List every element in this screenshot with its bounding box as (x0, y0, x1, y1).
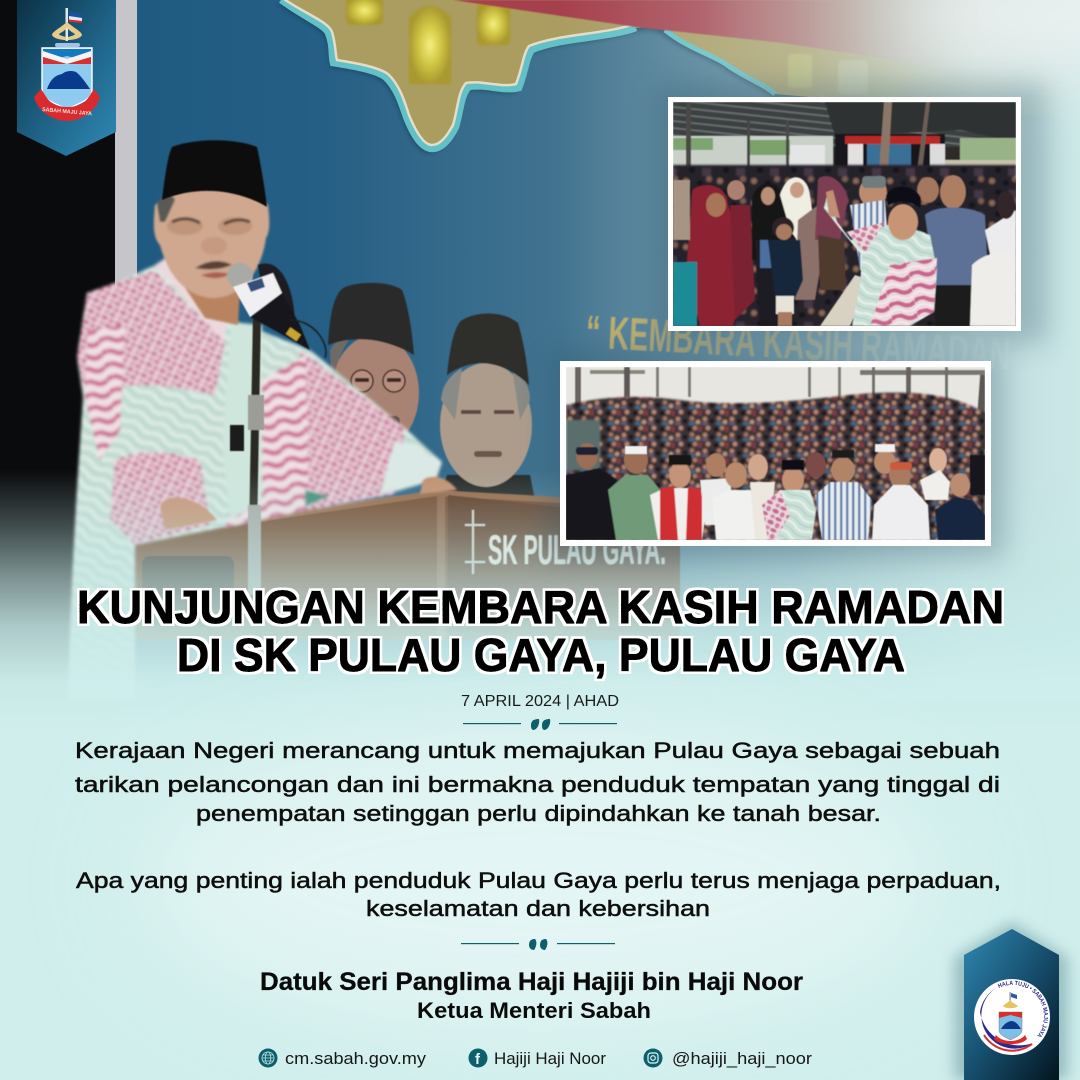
footer: facebook: f (475, 1051, 481, 1068)
statement paragraph one: tarikan pelancongan dan ini bermakna penduduk tempatan yang tinggal di (75, 772, 1000, 797)
gold arch ornament (278, 0, 1080, 153)
podium (133, 493, 680, 640)
date line: 7 APRIL 2024 | AHAD (461, 693, 619, 710)
icon: red ribbon with motto: SABAH MAJU JAYA (42, 107, 92, 117)
small crest (994, 992, 1027, 1044)
top-right corner haze (890, 0, 1080, 70)
panel: bottom-right slogan pennant (947, 918, 1075, 1080)
hands, neck and face (154, 186, 457, 530)
boy in navy (772, 217, 794, 239)
icon: red ribbon with motto (34, 89, 100, 121)
green shirt man (624, 446, 648, 474)
shirt (68, 255, 442, 700)
photo: visit crowd with chief minister (655, 84, 1047, 344)
logo disc (974, 979, 1050, 1055)
left dark wall (0, 0, 115, 780)
right pale fade (560, 0, 1080, 700)
blue and red crescents (980, 988, 1033, 1051)
woman behind (748, 454, 768, 480)
title (77, 581, 1004, 681)
banner portrait: man one (328, 283, 419, 451)
centre light glow (140, 730, 940, 1030)
floor (820, 275, 870, 326)
white blouse woman (929, 448, 947, 472)
back men (874, 450, 896, 474)
white shirt man behind (706, 453, 726, 477)
title: DI SK PULAU GAYA, PULAU GAYA (177, 629, 905, 681)
white hijab woman (780, 177, 815, 245)
white robe man (872, 485, 930, 540)
man in striped shirt (859, 177, 887, 207)
right side people (985, 210, 1016, 262)
statement paragraph one (75, 738, 1000, 826)
blue shirt man (940, 175, 966, 209)
statement paragraph two: Apa yang penting ialah penduduk Pulau Gaya perlu terus menjaga perpaduan, (76, 868, 1001, 893)
icon: crest beads (55, 43, 80, 47)
bottom teal fade (0, 470, 1080, 730)
footer: website: cm.sabah.gov.my (285, 1049, 427, 1068)
podium: SK PULAU GAYA. (488, 526, 666, 573)
man in dark (917, 177, 939, 203)
banner portrait: man two (440, 314, 535, 500)
maroon hijab (815, 176, 848, 240)
red vest man (669, 462, 691, 488)
navy woman (950, 473, 970, 497)
statement paragraph two: keselamatan dan kebersihan (366, 896, 710, 921)
photo: group photo with crowd (548, 350, 1004, 558)
hijab woman (806, 452, 826, 478)
black songkok (162, 140, 267, 207)
panel: top-left crest pennant (17, 0, 116, 156)
security officer (576, 443, 598, 469)
white pillar (115, 0, 137, 300)
statement paragraph one: penempatan setinggan perlu dipindahkan ke tanah besar. (196, 801, 881, 826)
footer: facebook: Hajiji Haji Noor (494, 1049, 606, 1068)
title: KUNJUNGAN KEMBARA KASIH RAMADAN (77, 581, 1004, 633)
footer: instagram: @hajiji_haji_noor (672, 1049, 812, 1068)
statement paragraph two (76, 868, 1001, 921)
speaker name: Datuk Seri Panglima Haji Hajiji bin Haji Noor (260, 968, 803, 996)
woman in black hijab (752, 184, 790, 260)
lanterns (346, 0, 868, 94)
white shirt man front (725, 462, 747, 488)
icon: sabah flag (66, 8, 82, 41)
slogan arc text: HALA TUJU • SABAH MAJU JAYA (998, 980, 1048, 1037)
chief minister in pink batik (824, 192, 937, 326)
divider: opening quote (463, 719, 617, 730)
icon: gold hands (52, 22, 82, 40)
microphone and stand (227, 263, 326, 595)
icon: shield (42, 48, 92, 109)
chief minister speaking (68, 140, 457, 700)
speaker role: Ketua Menteri Sabah (417, 998, 651, 1023)
red curtain band (453, 0, 1080, 80)
statement paragraph one: Kerajaan Negeri merancang untuk memajukan Pulau Gaya sebagai sebuah (75, 738, 1000, 763)
chief minister (782, 467, 804, 493)
striped shirt man (831, 457, 855, 483)
divider: closing quote (461, 939, 615, 950)
woman in red (686, 185, 740, 326)
